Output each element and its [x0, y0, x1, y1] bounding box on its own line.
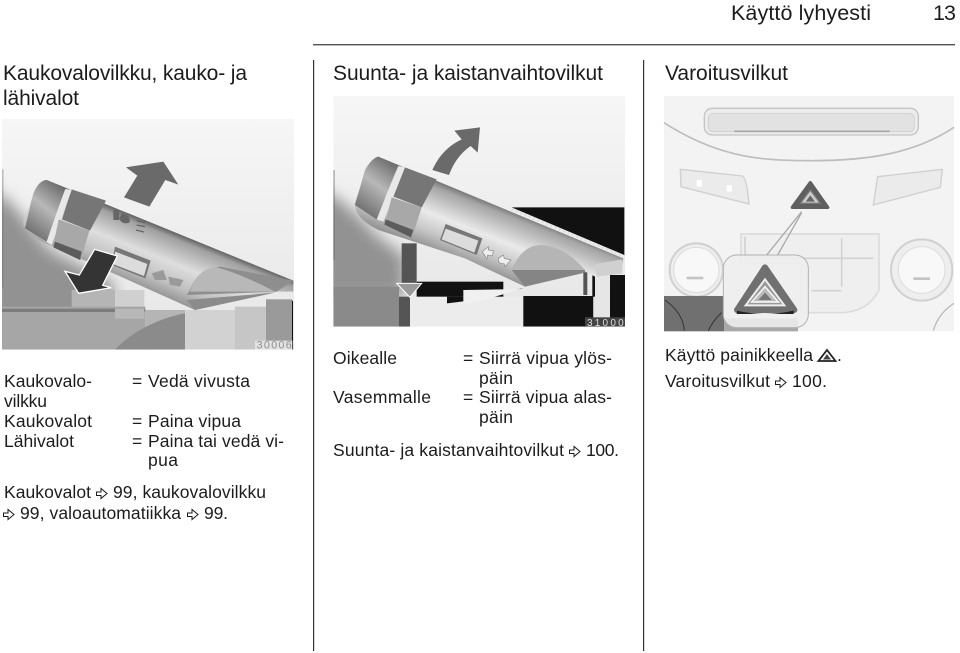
cross references: Kaukovalot	[4, 482, 91, 502]
panel: turn and lane change	[318, 62, 625, 460]
switch button	[112, 247, 151, 278]
small hazard button	[792, 183, 828, 207]
cross references: 99.	[204, 503, 228, 523]
arrow up	[432, 127, 480, 175]
definition list: Siirrä vipua alas-	[479, 387, 612, 407]
large hazard button	[737, 267, 794, 310]
body text: .	[837, 345, 842, 365]
heading: high beam: Kaukovalovilkku, kauko- ja	[3, 62, 247, 85]
heading: turn signals: Suunta- ja kaistanvaihtovilkut	[333, 62, 603, 85]
illustration: turn signal stalk: 31000	[587, 318, 624, 329]
body text: Käyttö painikkeella	[665, 345, 813, 365]
definition list: Kaukovalot	[4, 411, 92, 431]
cross reference: Suunta- ja kaistanvaihtovilkut	[333, 440, 564, 460]
symbols	[113, 210, 130, 223]
icon: reference arrow	[4, 510, 14, 520]
heading: high beam: lähivalot	[3, 87, 79, 110]
definition list: =	[132, 431, 142, 451]
definition list: =	[132, 411, 142, 431]
arrow up	[124, 162, 178, 207]
body text: Varoitusvilkut	[665, 371, 770, 391]
arrow down	[65, 249, 117, 293]
definition list: =	[463, 348, 473, 368]
heading: high beam	[3, 62, 247, 110]
column divider left	[313, 60, 314, 651]
stalk body	[355, 157, 623, 287]
column divider right	[643, 60, 644, 651]
body text	[665, 345, 842, 391]
cross references: 99, valoautomatiikka	[20, 503, 181, 523]
direction symbols	[482, 247, 511, 267]
icon: reference arrow	[96, 488, 107, 498]
definition list: pua	[148, 450, 178, 470]
definition list: Oikealle	[333, 348, 397, 368]
reference number: 30006	[257, 340, 292, 352]
dark upper wedge	[512, 207, 624, 255]
illustration: high beam stalk	[0, 119, 294, 352]
illustration: turn signal stalk	[318, 96, 625, 329]
definition list: =	[463, 387, 473, 407]
page header title: Käyttö lyhyesti	[731, 1, 871, 25]
definition list: Vedä vivusta	[148, 371, 250, 391]
icon: hazard triangle	[818, 350, 836, 361]
page number: 13	[933, 1, 956, 25]
callout box	[723, 255, 808, 328]
knob grip	[393, 167, 437, 207]
knob grip	[62, 189, 106, 231]
cross references	[4, 482, 266, 523]
icon: reference arrow	[776, 378, 786, 388]
definition list: Kaukovalo-	[4, 371, 92, 391]
definition list: päin	[479, 407, 513, 427]
panel: high beam and flash	[0, 62, 294, 523]
definition list: =	[132, 371, 142, 391]
panel: hazard lights	[664, 62, 954, 391]
left dotted edge	[333, 170, 335, 260]
callout lines	[767, 212, 802, 255]
icon: reference arrow	[570, 446, 580, 456]
left dotted edge	[2, 169, 4, 288]
header rule	[313, 44, 955, 45]
definition list: Vasemmalle	[333, 387, 431, 407]
heading: hazard: Varoitusvilkut	[665, 62, 788, 85]
cross reference: 100.	[586, 440, 619, 460]
body text: 100.	[792, 371, 827, 391]
definition list	[4, 371, 284, 470]
definition list: Paina vipua	[148, 411, 241, 431]
definition list: Siirrä vipua ylös-	[479, 348, 612, 368]
definition list: vilkku	[4, 391, 47, 411]
cross references: 99, kaukovalovilkku	[113, 482, 266, 502]
illustration: hazard button console	[664, 96, 954, 331]
icon: reference arrow	[188, 510, 198, 520]
definition list: päin	[479, 368, 513, 388]
definition list	[333, 348, 612, 427]
stalk body	[23, 180, 293, 310]
switch button	[440, 224, 482, 255]
definition list: Paina tai vedä vi-	[148, 431, 284, 451]
definition list: Lähivalot	[4, 431, 74, 451]
